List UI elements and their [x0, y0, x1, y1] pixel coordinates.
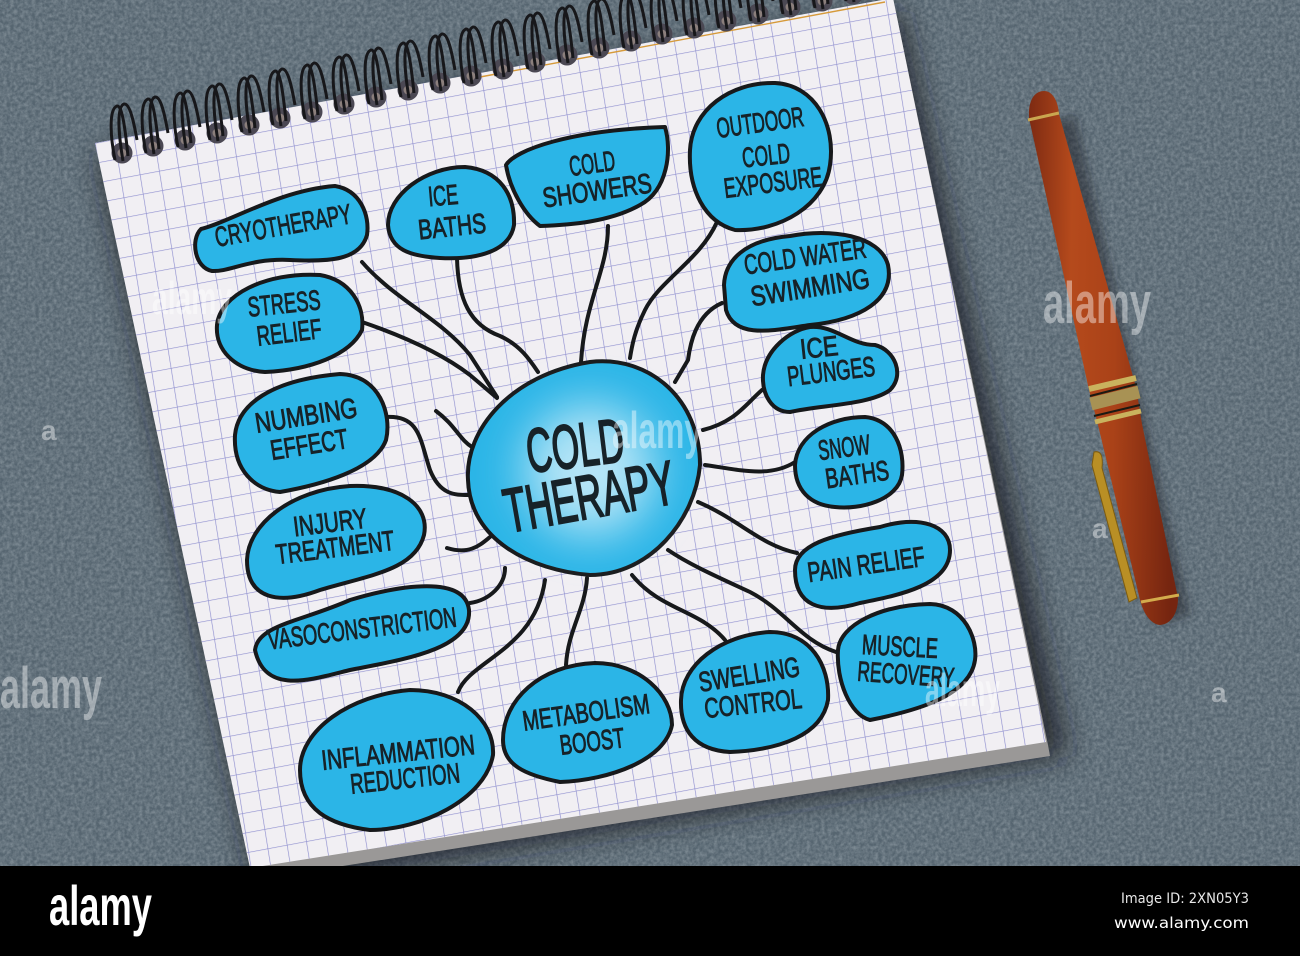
branch: Pain Relief — [795, 522, 950, 608]
branch: Swelling Control: CONTROL — [703, 683, 803, 724]
central topic: Cold Therapy: COLD — [522, 406, 628, 487]
icon: wooden pen — [1028, 91, 1179, 625]
branch: Cold Showers: COLD — [567, 145, 617, 182]
pen shadow — [1045, 115, 1190, 625]
branch: Swelling Control — [681, 632, 828, 752]
branch: Ice Plunges — [763, 327, 897, 412]
branch: Outdoor Cold Exposure: OUTDOOR — [714, 101, 806, 144]
branch: Cold Showers — [506, 127, 668, 226]
central topic: Cold Therapy — [468, 361, 700, 575]
branch: Ice Baths — [388, 167, 514, 258]
branch: Inflammation Reduction — [300, 690, 493, 830]
watermark: a — [1092, 513, 1108, 544]
branch: Snow Baths: BATHS — [823, 455, 891, 494]
watermark: alamy — [612, 402, 702, 460]
connectors between central topic and branches — [362, 222, 836, 692]
branch: Stress Relief: RELIEF — [255, 313, 323, 352]
logo: alamy: alamy — [49, 874, 152, 937]
watermark: alamy — [1043, 271, 1151, 336]
branch: Ice Plunges: PLUNGES — [785, 351, 877, 392]
branch: Injury Treatment: INJURY — [291, 503, 369, 542]
watermark: alamy — [0, 656, 102, 721]
branch: Swelling Control: SWELLING — [696, 651, 802, 698]
branch: Numbing Effect: NUMBING — [253, 392, 359, 439]
branch: Muscle Recovery: MUSCLE — [861, 629, 939, 664]
notebook shadow — [98, 10, 1068, 890]
branch: Inflammation Reduction: INFLAMMATION — [320, 729, 476, 776]
branch: Outdoor Cold Exposure — [690, 83, 831, 230]
branch: Cold Water Swimming — [724, 233, 889, 331]
branch: Metabolism Boost: METABOLISM — [521, 688, 652, 737]
watermark: alamy — [925, 664, 1000, 716]
watermark: alamy — [152, 272, 232, 324]
watermark — [0, 271, 1227, 721]
branch: Ice Baths: ICE — [427, 179, 459, 212]
branch: Pain Relief: PAIN RELIEF — [805, 541, 927, 588]
image credit text: Image ID: 2XN05Y3 — [1121, 891, 1249, 907]
watermark: a — [41, 415, 57, 446]
image credit text: www.alamy.com — [1114, 914, 1249, 932]
branch: Snow Baths: SNOW — [816, 429, 872, 466]
branch: Cold Water Swimming: COLD WATER — [742, 233, 868, 280]
branch: Stress Relief: STRESS — [246, 284, 322, 323]
branch: Cold Showers: SHOWERS — [540, 167, 654, 213]
notebook — [95, 0, 1050, 880]
branch: Cold Water Swimming: SWIMMING — [748, 263, 872, 312]
branch: Injury Treatment: TREATMENT — [274, 525, 396, 570]
branch: Outdoor Cold Exposure: EXPOSURE — [722, 161, 824, 204]
branch: Ice Plunges: ICE — [799, 330, 840, 365]
branch: Muscle Recovery — [838, 604, 975, 720]
branch: Muscle Recovery: RECOVERY — [857, 656, 956, 693]
branch: Metabolism Boost — [503, 663, 672, 782]
branch: Injury Treatment — [247, 486, 425, 598]
image credit text — [1114, 891, 1249, 932]
branch: Outdoor Cold Exposure: COLD — [741, 138, 792, 173]
branch: Numbing Effect — [235, 374, 387, 492]
branch: Vasoconstriction: VASOCONSTRICTION — [266, 602, 458, 655]
branch: Ice Baths: BATHS — [417, 208, 487, 245]
branch: Metabolism Boost: BOOST — [558, 722, 626, 761]
watermark: a — [1211, 677, 1227, 708]
spiral binding — [111, 0, 868, 163]
footer bar — [0, 866, 1300, 956]
branch: Numbing Effect: EFFECT — [268, 423, 350, 466]
branch: Cryotherapy — [195, 186, 368, 271]
branch: Stress Relief — [217, 275, 362, 372]
central topic: Cold Therapy: THERAPY — [499, 449, 680, 546]
branch: Inflammation Reduction: REDUCTION — [349, 757, 461, 800]
branch: Snow Baths — [795, 417, 903, 508]
branch: Cryotherapy: CRYOTHERAPY — [212, 198, 354, 253]
branch: Vasoconstriction — [255, 586, 469, 681]
